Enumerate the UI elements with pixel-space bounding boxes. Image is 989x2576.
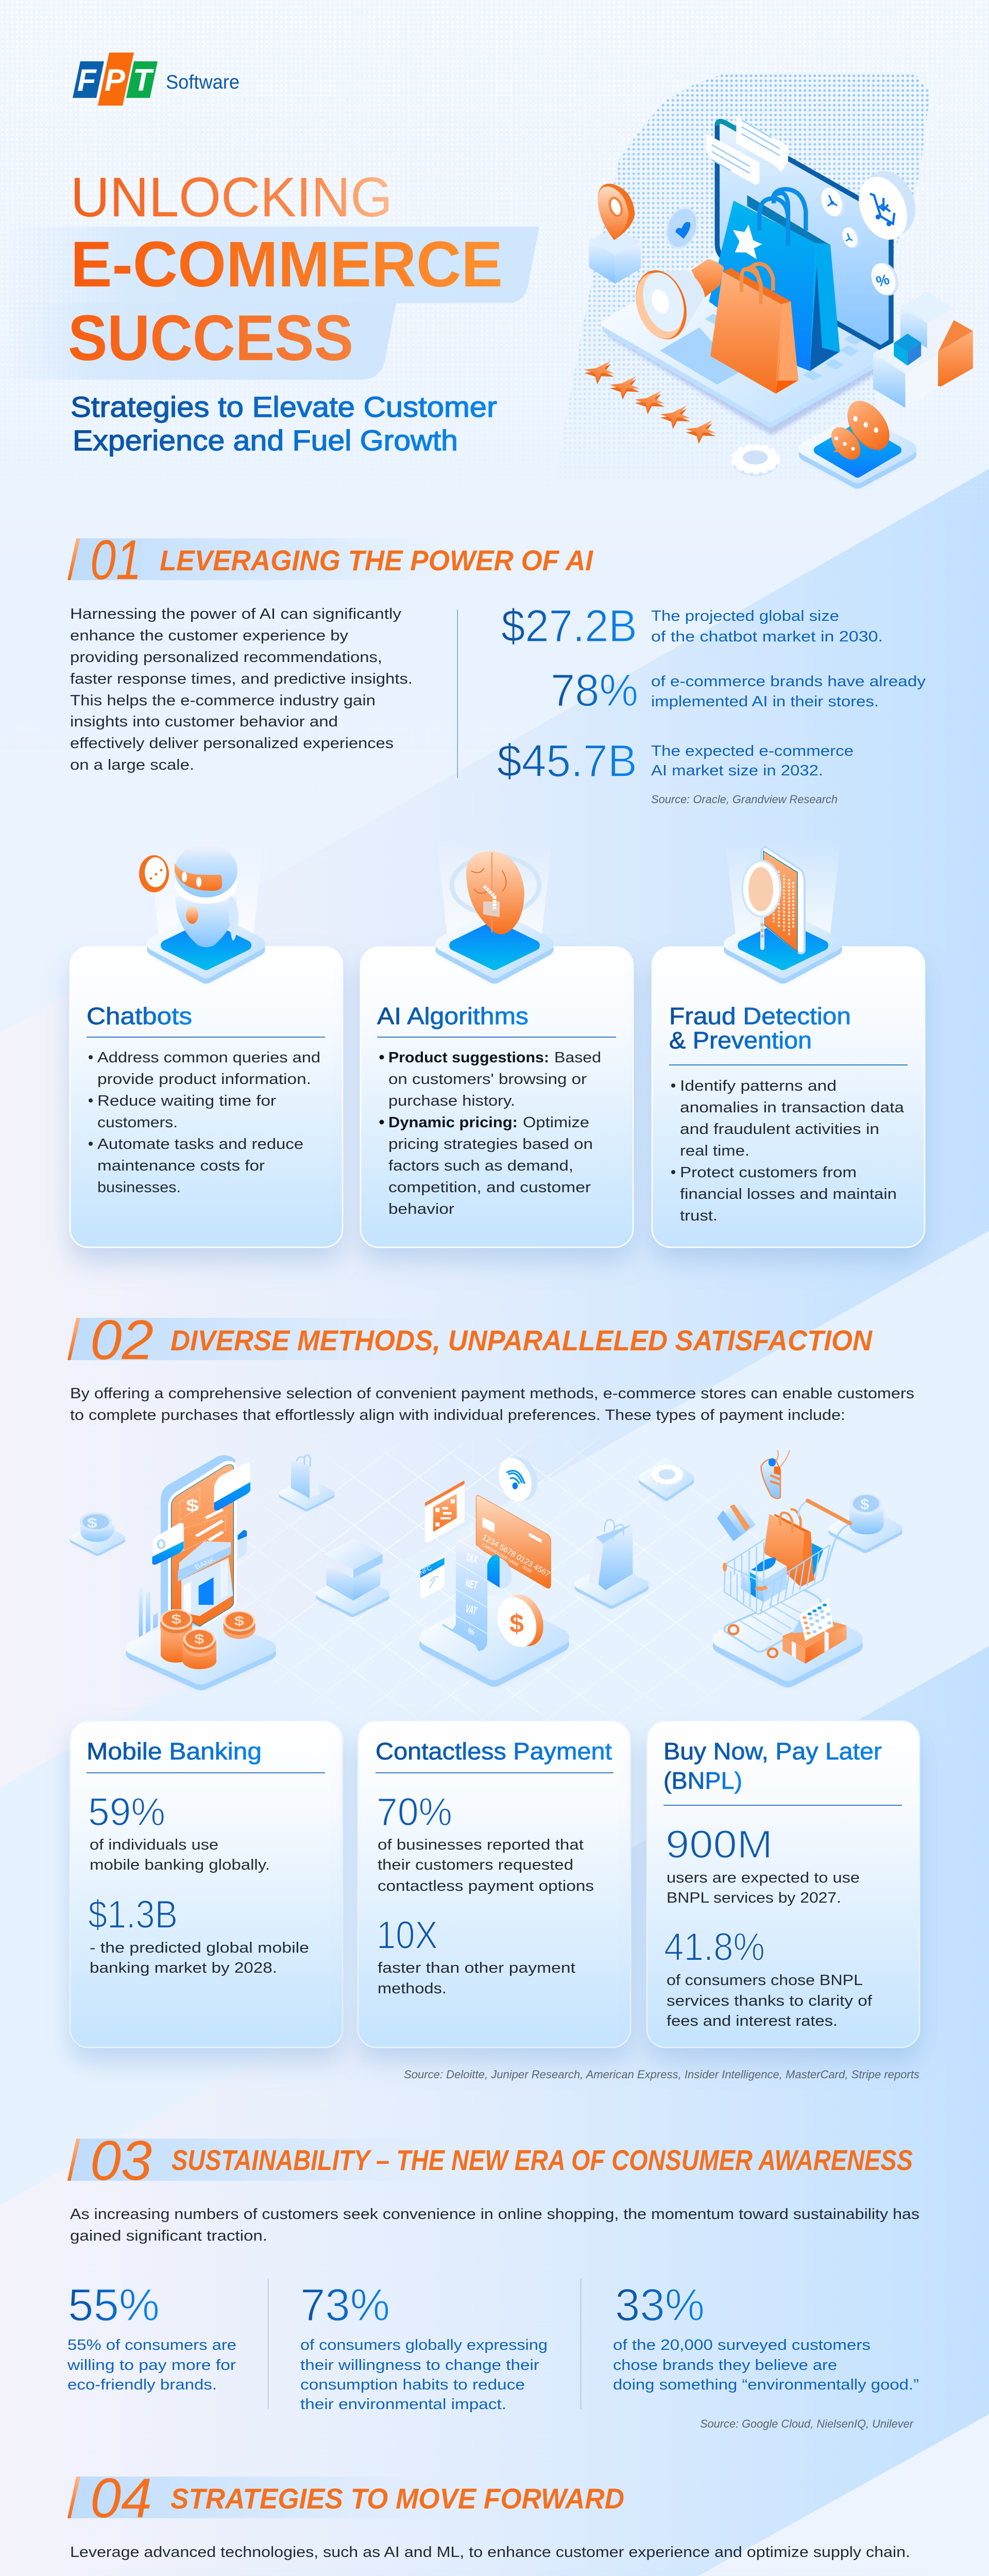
card: fraud detection: anomalies in transaction data [680,1099,905,1116]
section 04 heading [67,2467,624,2530]
statistic: 73% [300,2279,548,2413]
blue shopping bag [709,189,840,371]
illustration: buy now pay later [642,1450,897,1683]
chat notes on screen [706,116,788,185]
logo: FPT Software [73,53,240,106]
NFC card: NFC [418,1564,433,1577]
card: contactless payment: Contactless Payment [376,1738,612,1765]
right side boxes [873,292,973,408]
intro paragraph: on a large scale. [70,757,194,773]
bank: BANK [193,1556,217,1571]
hero illustration [585,116,973,485]
coin stacks [160,1609,255,1669]
card: AI algorithms: pricing strategies based on [388,1136,593,1153]
heading band [71,2477,443,2518]
card: fraud detection: and fraudulent activities in [680,1121,879,1138]
rating stars [585,361,716,444]
logo green block [126,61,158,98]
paragraph [70,1385,914,1423]
card: buy now pay later: 900M [666,1823,773,1867]
illustration: mobile banking [73,1454,385,1686]
slash mark [67,2139,80,2181]
section title: LEVERAGING THE POWER OF AI [160,544,593,577]
card: buy now pay later [647,1721,919,2047]
icon discs on screen: % [874,271,891,291]
small coin platform [73,1513,122,1554]
NFC card [418,1556,445,1599]
statistic: AI adoption [551,665,926,716]
laptop screen [717,122,891,348]
bag platform [579,1520,644,1606]
card: chatbots: businesses. [97,1179,181,1196]
bank [178,1541,233,1616]
statistic: chatbot market: The projected global size [651,608,839,624]
card: contactless payment: 70% [377,1790,452,1834]
section number: 04 [90,2467,152,2530]
statistic: chatbot market [501,600,883,651]
statistic: AI adoption: 78% [551,665,638,716]
section 01 heading [67,529,593,591]
card: contactless payment: methods. [378,1980,447,1997]
statistic: AI adoption: of e-commerce brands have already [651,673,926,690]
statistic: AI market: AI market size in 2032. [651,762,823,779]
card: mobile banking: mobile banking globally. [90,1857,270,1873]
logo letters: T [133,63,154,97]
logo blue block [73,61,104,98]
slash mark [67,1318,80,1360]
statistic: AI market [497,735,854,786]
intro paragraph: enhance the customer experience by [70,628,349,644]
large platform [135,1618,266,1686]
card: chatbots: customers. [97,1114,178,1131]
orange credit card: 05/25 [521,1565,533,1574]
wifi disc [493,1452,543,1506]
logo letters: P [105,63,126,97]
subtitle: Strategies to Elevate Customer [71,391,497,423]
card: buy now pay later: 41.8% [664,1925,765,1969]
card: buy now pay later: users are expected to use [667,1870,860,1886]
card: contactless payment: their customers requested [378,1857,573,1873]
card: mobile banking [70,1721,343,2047]
divider [457,609,458,778]
card: chatbots: Automate tasks and reduce [97,1136,303,1153]
paragraph: to complete purchases that effortlessly align with individual preferences. These types of payment include: [70,1407,845,1423]
card: chatbots: Address common queries and [97,1049,320,1066]
title bands [0,227,539,380]
card: buy now pay later: fees and interest rates. [667,2013,838,2029]
card: AI algorithms: purchase history. [388,1093,515,1109]
receipt: NET [464,1577,479,1592]
intro paragraph: effectively deliver personalized experiences [70,735,394,752]
paragraph: gained significant traction. [70,2228,267,2244]
large platform [723,1606,853,1683]
statistic: 73%: of consumers globally expressing [300,2337,548,2353]
intro paragraph: Harnessing the power of AI can significantly [70,606,402,622]
icon: AI brain on platform [437,840,552,980]
card: AI algorithms: Optimize [523,1114,589,1131]
logo orange block [98,53,134,106]
box platform [321,1539,385,1615]
card: chatbots: provide product information. [97,1071,311,1088]
large platform [429,1603,559,1682]
laptop base [607,257,894,435]
card: buy now pay later: (BNPL) [663,1767,742,1794]
floating card [717,1502,756,1541]
title: UNLOCKING [71,166,393,229]
card: buy now pay later: Buy Now, Pay Later [663,1738,882,1765]
statistic: chatbot market: $27.2B [501,600,637,651]
statistic: 55%: willing to pay more for [67,2357,236,2374]
heading band [71,2139,443,2181]
logo letters [77,63,154,97]
card: AI algorithms: on customers' browsing or [388,1071,587,1088]
card: AI algorithms [361,947,633,1247]
section number: 01 [90,529,142,591]
card: buy now pay later: of consumers chose BNPL [667,1972,863,1989]
location pin on box [589,183,641,284]
statistic: 73%: consumption habits to reduce [300,2377,525,2393]
card: fraud detection: real time. [680,1143,749,1159]
receipt: TAX [464,1551,479,1566]
statistic: AI market: $45.7B [497,735,637,786]
statistic: chatbot market: of the chatbot market in 2030. [651,629,883,645]
dollar coin: $ [509,1609,524,1638]
coin platform: $ [860,1496,869,1513]
card: AI algorithms: Based [554,1049,601,1066]
card: AI algorithms: Product suggestions: [388,1049,549,1066]
statistic: 33%: chose brands they believe are [613,2357,837,2374]
card: contactless payment: contactless payment options [378,1878,594,1894]
card: AI algorithms: AI Algorithms [377,1003,528,1029]
icon: chatbot on platform [139,840,264,980]
slash mark [67,2477,80,2518]
gear platform [642,1462,690,1499]
gear platform part [642,1467,677,1494]
statistic: 73%: their willingness to change their [300,2357,539,2374]
card: chatbots: Reduce waiting time for [97,1093,276,1109]
card: chatbots: maintenance costs for [97,1158,265,1174]
title [68,166,503,374]
source: Source: Google Cloud, NielsenIQ, Unilever [700,2417,914,2430]
card: mobile banking: $1.3B [88,1893,178,1937]
logo letters: F [77,63,97,97]
card: fraud detection: Fraud Detection [669,1003,851,1029]
orange shopping bag [710,264,798,394]
subtitle [71,391,497,456]
statistic: 33%: of the 20,000 surveyed customers [613,2337,871,2353]
heading band [71,1318,443,1360]
gear [732,446,778,476]
icon: fraud detection phone on platform [725,840,841,980]
coin stacks: $ [171,1612,181,1627]
receipt [442,1536,511,1651]
bag platform [283,1454,331,1510]
card: fraud detection: Protect customers from [680,1164,857,1181]
parcel and calendar [782,1599,847,1664]
section number: 02 [90,1309,154,1371]
bars [139,1585,158,1637]
heading band [71,538,443,580]
phone: $ [186,1496,199,1515]
statistic: 33% [613,2279,919,2393]
title: SUCCESS [68,302,353,374]
intro paragraph: faster response times, and predictive insights. [70,671,413,687]
card: mobile banking: Mobile Banking [87,1738,262,1765]
dollar coin [490,1589,550,1653]
orange credit card [476,1496,552,1588]
card: mobile banking: banking market by 2028. [90,1960,277,1976]
QR window [425,1480,465,1543]
source: Source: Oracle, Grandview Research [651,793,838,806]
title: E-COMMERCE [71,229,503,300]
card: mobile banking: 59% [88,1790,165,1834]
statistic: AI market: The expected e-commerce [651,743,854,759]
statistic: 55%: 55% of consumers are [67,2337,236,2353]
card: AI algorithms: competition, and customer [388,1179,591,1196]
logo wordmark: Software [166,72,240,93]
card: fraud detection: Identify patterns and [680,1078,837,1094]
receipt: % [467,1628,475,1637]
card: buy now pay later: BNPL services by 2027. [667,1890,841,1906]
illustration: contactless payment [418,1452,677,1682]
intro paragraph: This helps the e-commerce industry gain [70,692,376,709]
floating cards [152,1462,250,1565]
card: contactless payment [358,1721,630,2047]
slash mark [67,538,80,580]
source: Source: Deloitte, Juniper Research, American Express, Insider Intelligence, MasterCard, Stripe reports [404,2068,919,2081]
chat platform [807,394,909,485]
coin stacks: $ [234,1613,244,1629]
card: AI algorithms: Dynamic pricing: [388,1114,518,1131]
card: chatbots [70,947,343,1247]
receipt: VAT [464,1602,479,1617]
orange credit card: CARDHOLDER NAME [481,1543,520,1567]
card: mobile banking: - the predicted global mobile [90,1940,309,1956]
card: AI algorithms: behavior [388,1201,454,1217]
shopping cart [723,1501,850,1657]
statistic: 55% [67,2279,236,2393]
card: mobile banking: of individuals use [90,1837,218,1853]
section number: 03 [90,2129,152,2192]
small coin platform: $ [87,1515,98,1531]
paragraph [70,2206,919,2244]
coin stacks: $ [194,1631,204,1647]
card: fraud detection: trust. [680,1208,718,1224]
card: contactless payment: 10X [377,1913,438,1957]
card: chatbots: Chatbots [87,1003,192,1029]
paragraph: By offering a comprehensive selection of convenient payment methods, e-commerce stores can enable customers [70,1385,914,1402]
card: contactless payment: of businesses reported that [378,1837,584,1853]
statistic: 73%: 73% [300,2279,390,2330]
card: buy now pay later: services thanks to clarity of [667,1993,873,2009]
coin platform [833,1494,897,1551]
statistic: 55%: eco-friendly brands. [67,2377,217,2393]
paragraph: Leverage advanced technologies, such as AI and ML, to enhance customer experience and optimize supply chain. [70,2544,910,2561]
statistic: 55%: 55% [68,2279,160,2330]
card: fraud detection: & Prevention [669,1027,812,1054]
dotted blob behind hero [556,72,930,479]
heart disc [660,202,703,253]
orange credit card: 1234 5678 0123 4567 [481,1533,552,1579]
card: contactless payment: faster than other payment [378,1960,575,1976]
phone [161,1455,236,1627]
section title: DIVERSE METHODS, UNPARALLELED SATISFACTION [170,1324,873,1357]
paragraph: As increasing numbers of customers seek convenience in online shopping, the momentum toward sustainability has [70,2206,919,2223]
card: fraud detection: financial losses and maintain [680,1186,897,1202]
statistic: 33%: 33% [615,2279,705,2330]
statistic: 73%: their environmental impact. [300,2396,506,2413]
section 02 heading [67,1309,873,1371]
card: fraud detection [652,947,925,1247]
section 03 heading [67,2129,913,2192]
intro paragraph: insights into customer behavior and [70,714,338,730]
floating shoe [761,1450,790,1499]
intro paragraph [70,606,413,773]
section title: STRATEGIES TO MOVE FORWARD [170,2482,624,2515]
megaphone [627,259,724,346]
subtitle: Experience and Fuel Growth [73,424,458,456]
card: AI algorithms: factors such as demand, [388,1158,573,1174]
statistic: 33%: doing something “environmentally good.” [613,2377,919,2393]
intro paragraph: providing personalized recommendations, [70,649,382,666]
statistic: AI adoption: implemented AI in their stores. [651,693,879,710]
icon discs on screen [817,163,925,299]
